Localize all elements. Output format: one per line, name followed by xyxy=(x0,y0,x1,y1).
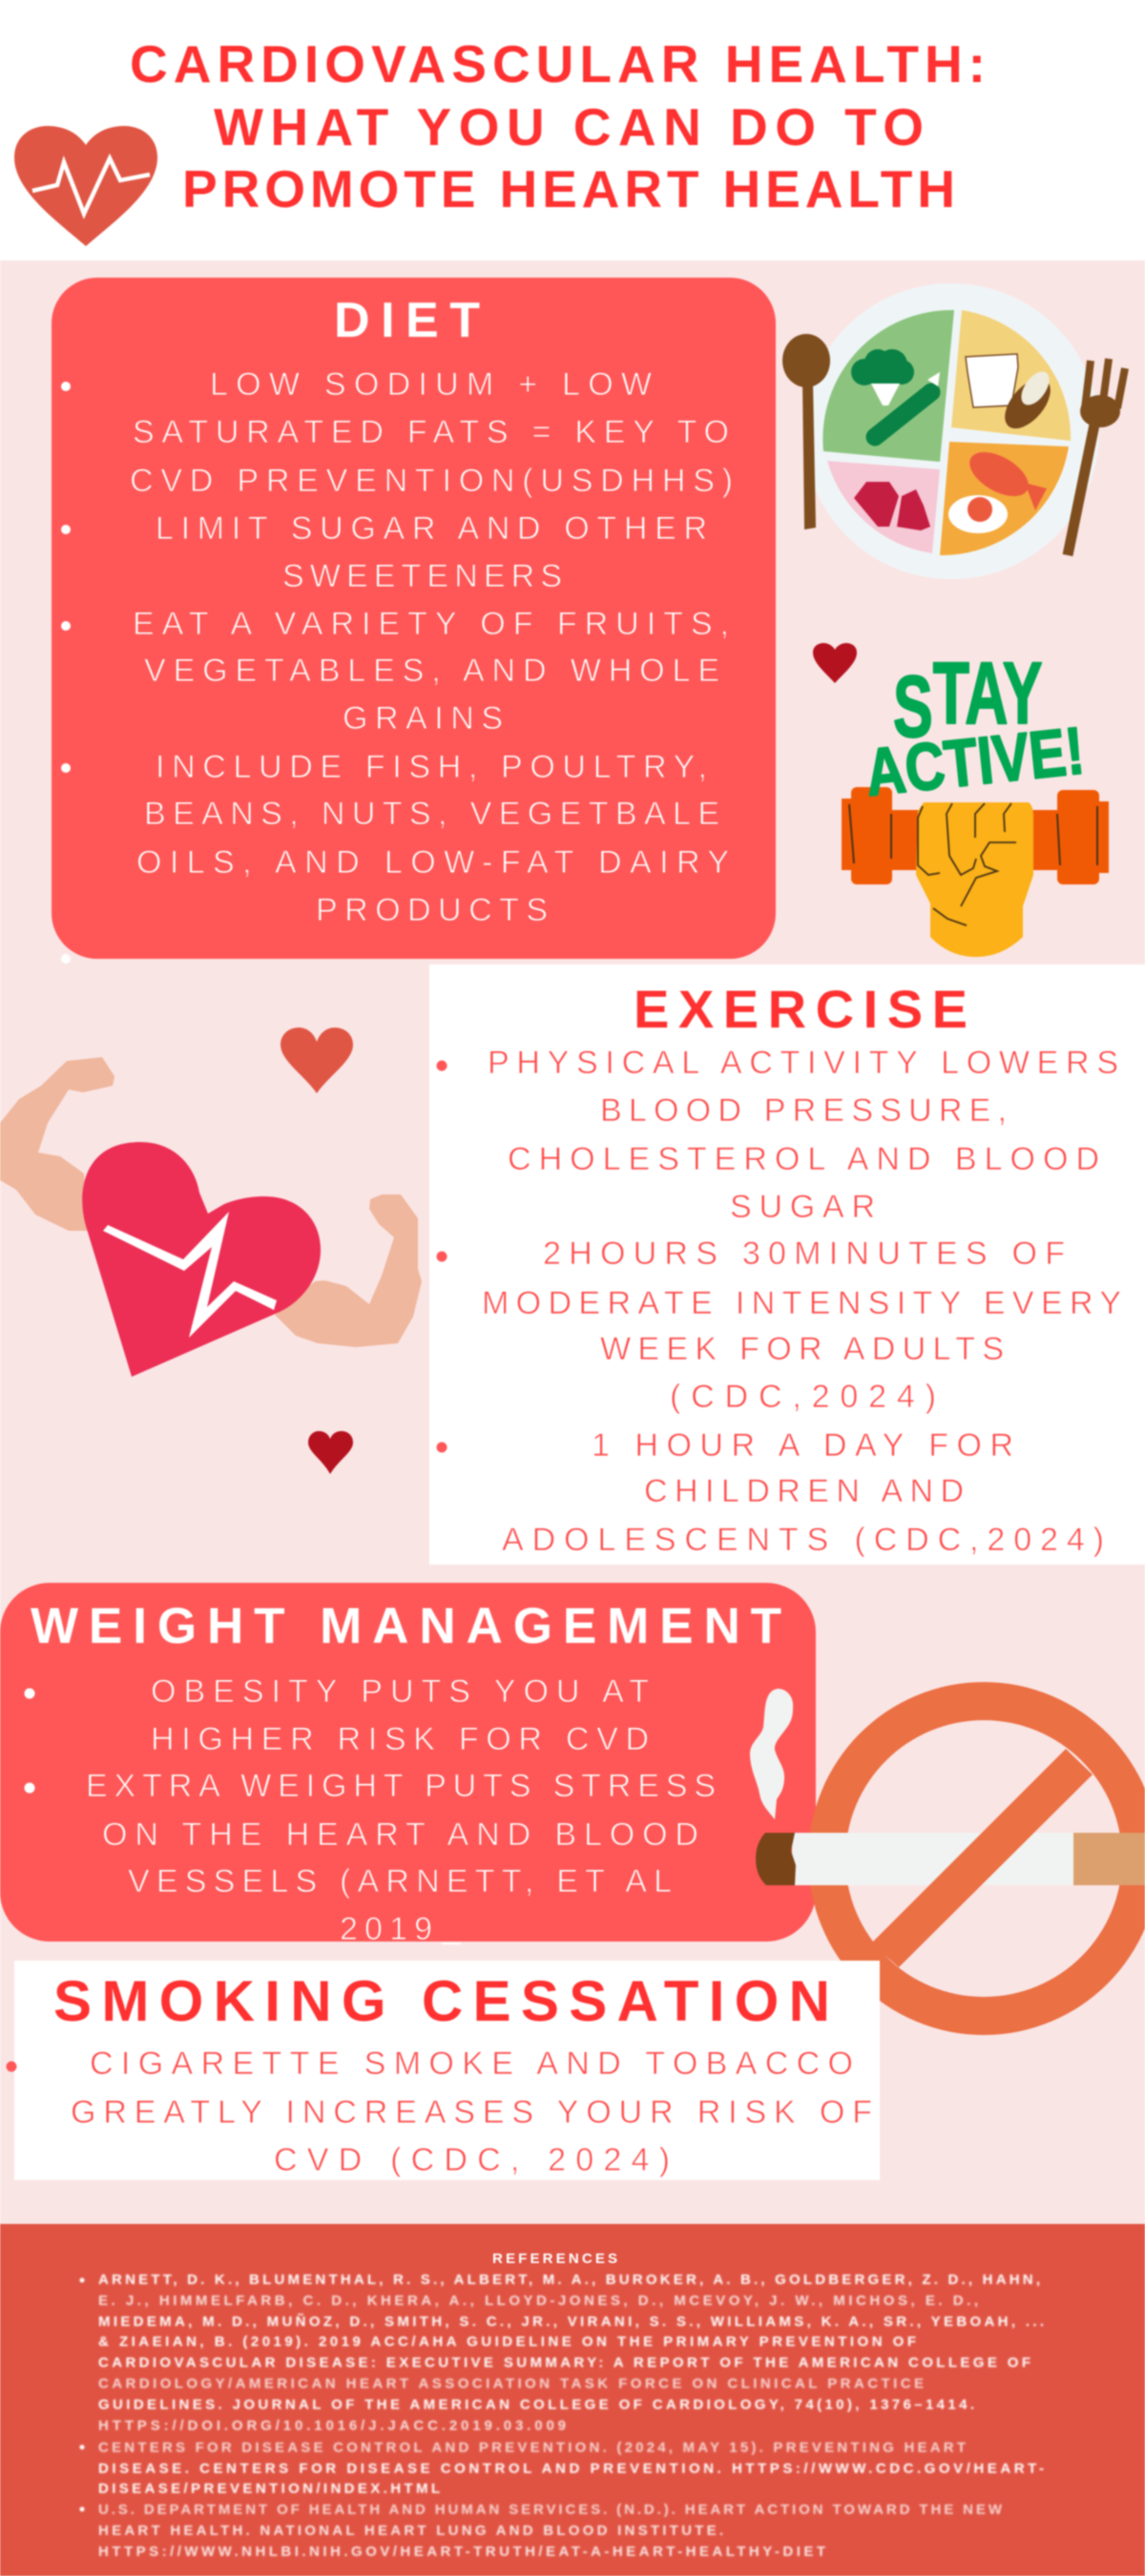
icon: small red heart xyxy=(813,643,857,683)
weight bullet list: OBESITY PUTS YOU AT xyxy=(151,1673,649,1710)
exercise bullet list: CHILDREN AND xyxy=(644,1473,964,1509)
heading: weight management: WEIGHT MANAGEMENT xyxy=(31,1598,781,1654)
exercise bullet list: CHOLESTEROL AND BLOOD xyxy=(508,1141,1099,1177)
stay active graphic xyxy=(842,644,1109,957)
icon: food plate xyxy=(803,283,1099,579)
references list: ARNETT, D. K., BLUMENTHAL, R. S., ALBERT, M. A., BUROKER, A. B., GOLDBERGER, Z. D., HAHN, xyxy=(98,2272,1040,2288)
exercise bullet list: PHYSICAL ACTIVITY LOWERS xyxy=(488,1045,1118,1081)
icon: heart with pulse xyxy=(14,126,157,246)
references list: CENTERS FOR DISEASE CONTROL AND PREVENTION. (2024, MAY 15). PREVENTING HEART xyxy=(98,2440,966,2456)
icon: orange heart xyxy=(281,1028,353,1093)
weight bullet list: EXTRA WEIGHT PUTS STRESS xyxy=(86,1768,716,1804)
smoke xyxy=(750,1689,793,1819)
stay active lettering xyxy=(862,644,1088,810)
exercise bullet list: MODERATE INTENSITY EVERY xyxy=(482,1285,1121,1321)
right arm xyxy=(275,1195,422,1347)
diet bullet list: INCLUDE FISH, POULTRY, xyxy=(156,749,707,785)
panel: weight management xyxy=(0,1583,816,1947)
diet bullet list: VEGETABLES, AND WHOLE xyxy=(144,653,719,689)
diet bullet list: CVD PREVENTION(USDHHS) xyxy=(130,463,733,499)
references list: E. J., HIMMELFARB, C. D., KHERA, A., LLOYD-JONES, D., MCEVOY, J. W., MICHOS, E. D., xyxy=(98,2293,978,2309)
exercise bullet list: 2HOURS 30MINUTES OF xyxy=(543,1236,1065,1272)
heading: diet: DIET xyxy=(334,293,480,348)
diet bullet list: PRODUCTS xyxy=(316,892,548,928)
references list: MIEDEMA, M. D., MUÑOZ, D., SMITH, S. C., JR., VIRANI, S. S., WILLIAMS, K. A., SR., YEBOAH, ... xyxy=(98,2313,1044,2330)
exercise bullet list: BLOOD PRESSURE, xyxy=(600,1092,1007,1129)
title: CARDIOVASCULAR HEALTH: xyxy=(130,34,986,93)
panel: exercise xyxy=(429,965,1145,1565)
exercise bullet list: (CDC,2024) xyxy=(670,1379,936,1415)
pink section with berries xyxy=(827,461,940,553)
references list: & ZIAEIAN, B. (2019). 2019 ACC/AHA GUIDELINE ON THE PRIMARY PREVENTION OF xyxy=(98,2334,916,2350)
exercise bullet list xyxy=(437,1045,1121,1558)
fist xyxy=(916,802,1033,957)
exercise bullet list: ADOLESCENTS (CDC,2024) xyxy=(502,1522,1104,1558)
diet bullet list: SWEETENERS xyxy=(282,558,562,594)
green section with broccoli and cucumber xyxy=(822,310,954,462)
references list: DISEASE. CENTERS FOR DISEASE CONTROL AND PREVENTION. HTTPS://WWW.CDC.GOV/HEART- xyxy=(98,2461,1044,2477)
diet bullet list: SATURATED FATS = KEY TO xyxy=(133,414,729,450)
yellow section with bread and potato xyxy=(951,310,1071,441)
cigarette xyxy=(756,1833,1145,1885)
icon: no smoking sign xyxy=(750,1682,1145,2035)
exercise bullet list: WEEK FOR ADULTS xyxy=(600,1331,1004,1367)
heading: exercise: EXERCISE xyxy=(634,979,968,1039)
references list xyxy=(80,2272,1044,2560)
icon: strong heart with arms xyxy=(0,1057,422,1377)
weight bullet list: HIGHER RISK FOR CVD xyxy=(151,1721,649,1757)
references list: HEART HEALTH. NATIONAL HEART LUNG AND BLOOD INSTITUTE. xyxy=(98,2523,723,2539)
diet bullet list xyxy=(61,366,733,964)
smoking bullet list: GREATLY INCREASES YOUR RISK OF xyxy=(71,2094,872,2130)
icon: fork xyxy=(1068,359,1125,555)
weight bullet list xyxy=(25,1673,716,1947)
diet bullet list: LIMIT SUGAR AND OTHER xyxy=(156,510,707,547)
references heading: REFERENCES xyxy=(492,2251,617,2267)
slash xyxy=(871,1749,1093,1967)
stay active lettering: STAY xyxy=(893,644,1042,756)
ring xyxy=(808,1682,1145,2035)
heading: smoking cessation: SMOKING CESSATION xyxy=(53,1969,830,2033)
stay active lettering: ACTIVE! xyxy=(862,713,1088,810)
dumbbell xyxy=(842,787,1109,884)
references list: U.S. DEPARTMENT OF HEALTH AND HUMAN SERVICES. (N.D.). HEART ACTION TOWARD THE NEW xyxy=(98,2502,1003,2518)
orange section with fish and egg xyxy=(940,442,1069,555)
diet bullet list: GRAINS xyxy=(343,700,503,737)
diet bullet list: LOW SODIUM + LOW xyxy=(210,366,652,403)
heart xyxy=(82,1142,321,1377)
title: WHAT YOU CAN DO TO xyxy=(214,97,924,156)
references list: HTTPS://WWW.NHLBI.NIH.GOV/HEART-TRUTH/EAT-A-HEART-HEALTHY-DIET xyxy=(98,2544,825,2560)
references list: CARDIOLOGY/AMERICAN HEART ASSOCIATION TASK FORCE ON CLINICAL PRACTICE xyxy=(98,2376,924,2392)
exercise bullet list: 1 HOUR A DAY FOR xyxy=(592,1427,1013,1464)
smoking bullet list xyxy=(6,2046,872,2178)
diet bullet list: EAT A VARIETY OF FRUITS, xyxy=(133,606,729,642)
panel: diet xyxy=(52,278,776,964)
references list: DISEASE/PREVENTION/INDEX.HTML xyxy=(98,2481,440,2497)
weight bullet list: 2019 xyxy=(340,1911,432,1947)
title xyxy=(130,34,986,218)
exercise bullet list: SUGAR xyxy=(730,1189,875,1225)
diet bullet list: BEANS, NUTS, VEGETBALE xyxy=(144,796,719,832)
smoking bullet list: CVD (CDC, 2024) xyxy=(274,2142,670,2178)
weight bullet list: VESSELS (ARNETT, ET AL xyxy=(128,1863,672,1900)
references list: GUIDELINES. JOURNAL OF THE AMERICAN COLLEGE OF CARDIOLOGY, 74(10), 1376–1414. xyxy=(98,2397,974,2413)
weight bullet list: ON THE HEART AND BLOOD xyxy=(102,1817,698,1853)
references list: CARDIOVASCULAR DISEASE: EXECUTIVE SUMMARY: A REPORT OF THE AMERICAN COLLEGE OF xyxy=(98,2355,1030,2371)
icon: spoon xyxy=(782,334,830,530)
pulse line xyxy=(103,1212,277,1338)
panel: references xyxy=(0,2224,1145,2576)
icon: dark red heart xyxy=(308,1431,353,1474)
diet bullet list: OILS, AND LOW-FAT DAIRY xyxy=(136,844,729,881)
references list: HTTPS://DOI.ORG/10.1016/J.JACC.2019.03.009 xyxy=(98,2418,566,2434)
title: PROMOTE HEART HEALTH xyxy=(182,159,955,218)
left arm xyxy=(0,1057,114,1231)
smoking bullet list: CIGARETTE SMOKE AND TOBACCO xyxy=(90,2046,853,2082)
panel: smoking cessation xyxy=(6,1961,880,2180)
